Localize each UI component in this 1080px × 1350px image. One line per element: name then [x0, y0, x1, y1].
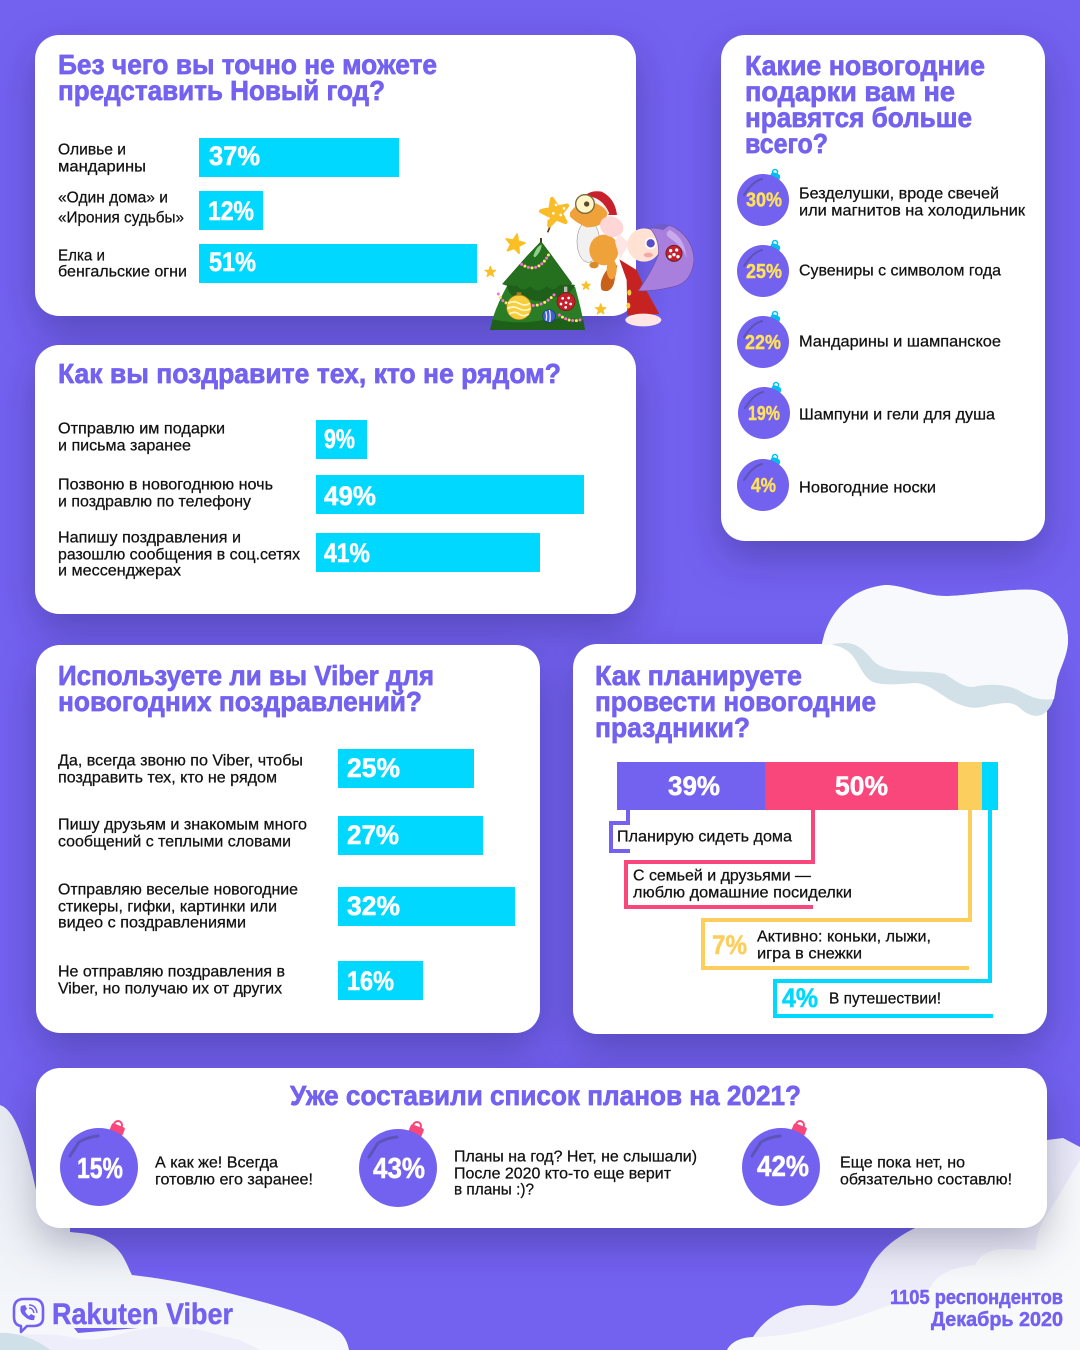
- row: olivier 37%: [58, 138, 399, 177]
- item: 43%: 43%: [373, 1153, 425, 1185]
- row: calls 25%: поздравить тех, кто не рядом: [58, 769, 277, 786]
- row: films 12%: «Один дома» и: [58, 189, 168, 206]
- callout: travel 4%: 4%: [782, 983, 818, 1013]
- heading: Как планируете: [595, 660, 802, 691]
- panel: using Viber for greetings: [36, 645, 540, 1033]
- row: tree 51%: Елка и: [58, 247, 105, 264]
- callout: family and friends: [626, 810, 852, 907]
- row: films 12%: «Ирония судьбы»: [58, 209, 184, 226]
- heading: новогодних поздравлений?: [58, 686, 422, 717]
- row: messages 41%: и мессенджерах: [58, 562, 181, 579]
- heading: Как вы поздравите тех, кто не рядом?: [58, 358, 561, 389]
- item: 15%: 15%: [77, 1153, 123, 1185]
- row: messages 41%: [58, 529, 540, 579]
- row: messages 41%: Напишу поздравления и: [58, 529, 241, 546]
- cloud: bottom right snow: [727, 1138, 1080, 1350]
- callout: family and friends: С семьей и друзьями —: [633, 867, 811, 884]
- item: 43%: [359, 1122, 697, 1207]
- respondents note: Декабрь 2020: [931, 1309, 1063, 1331]
- row: messages 41%: 41%: [324, 538, 370, 568]
- row: stickers 32%: [58, 881, 515, 931]
- heading: подарки вам не: [745, 76, 955, 107]
- heading: Без чего вы точно не можете: [58, 49, 437, 80]
- row: films 12%: 12%: [208, 196, 254, 226]
- item: trinkets 30%: Безделушки, вроде свечей: [799, 185, 999, 202]
- heading: Какие новогодние: [745, 50, 985, 81]
- callout: stay at home: Планирую сидеть дома: [617, 828, 792, 845]
- row: only receive 16%: Viber, но получаю их от других: [58, 980, 282, 997]
- row: gifts 9%: 9%: [324, 424, 355, 454]
- respondents note: [890, 1287, 1063, 1331]
- row: only receive 16%: 16%: [347, 966, 394, 996]
- heading: Уже составили список планов на 2021?: [290, 1080, 801, 1111]
- row: phone 49%: [58, 475, 584, 514]
- stacked bar: 50%: [835, 771, 888, 801]
- heading: [745, 50, 985, 159]
- row: messages 27%: [58, 816, 483, 855]
- row: olivier 37%: Оливье и: [58, 141, 126, 158]
- item: trinkets 30%: [737, 170, 1026, 226]
- logo: Rakuten Viber: Rakuten Viber: [52, 1298, 233, 1331]
- item: tangerines 22%: [737, 312, 1001, 368]
- row: calls 25%: [58, 749, 474, 788]
- row: gifts 9%: [58, 420, 367, 459]
- item: trinkets 30%: или магнитов на холодильник: [799, 202, 1026, 219]
- row: stickers 32%: Отправляю веселые новогодние: [58, 881, 298, 898]
- item: tangerines 22%: 22%: [745, 332, 781, 354]
- row: stickers 32%: стикеры, гифки, картинки или: [58, 898, 277, 915]
- row: tree 51%: 51%: [209, 247, 256, 277]
- row: calls 25%: Да, всегда звоню по Viber, чтобы: [58, 752, 303, 769]
- row: phone 49%: и поздравлю по телефону: [58, 493, 251, 510]
- row: gifts 9%: и письма заранее: [58, 437, 191, 454]
- cloud: bottom left snow: [0, 1105, 349, 1350]
- item: shampoo 19%: 19%: [748, 403, 780, 425]
- row: tree 51%: [58, 244, 477, 283]
- illustration: Christmas tree, cat and girl: [485, 191, 694, 330]
- item: 43%: в планы :)?: [454, 1181, 534, 1198]
- heading: [58, 49, 437, 106]
- panel: disliked gifts: [721, 35, 1045, 541]
- row: stickers 32%: 32%: [347, 891, 400, 921]
- row: only receive 16%: [58, 961, 423, 1000]
- row: films 12%: [58, 189, 263, 230]
- callout: stay at home: [611, 810, 792, 851]
- item: 42%: Еще пока нет, но: [840, 1154, 965, 1171]
- callout: active 7%: [703, 810, 970, 968]
- heading: провести новогодние: [595, 686, 876, 717]
- item: tangerines 22%: Мандарины и шампанское: [799, 333, 1001, 350]
- row: messages 27%: Пишу друзьям и знакомым много: [58, 816, 307, 833]
- girl: [597, 213, 694, 326]
- item: 42%: 42%: [757, 1151, 809, 1183]
- small stars: [485, 232, 606, 314]
- callout: travel 4%: В путешествии!: [829, 990, 941, 1007]
- heading: [58, 660, 434, 717]
- respondents note: 1105 респондентов: [890, 1287, 1063, 1309]
- heading: всего?: [745, 128, 828, 159]
- heading: праздники?: [595, 712, 750, 743]
- snow on plans panel: [822, 585, 1068, 716]
- item: souvenirs 25%: 25%: [746, 261, 782, 283]
- item: shampoo 19%: Шампуни и гели для душа: [799, 406, 995, 423]
- item: souvenirs 25%: Сувениры с символом года: [799, 262, 1001, 279]
- callout: active 7%: игра в снежки: [757, 945, 862, 962]
- row: calls 25%: 25%: [347, 753, 400, 783]
- row: gifts 9%: Отправлю им подарки: [58, 420, 225, 437]
- item: 15%: готовлю его заранее!: [155, 1171, 313, 1188]
- panel: plans list for 2021: [36, 1068, 1047, 1228]
- heading: представить Новый год?: [58, 75, 385, 106]
- stacked bar: [617, 762, 998, 810]
- row: messages 27%: сообщений с теплыми словами: [58, 833, 291, 850]
- item: 42%: обязательно составлю!: [840, 1171, 1012, 1188]
- heading: Используете ли вы Viber для: [58, 660, 434, 691]
- stacked bar: 39%: [668, 771, 720, 801]
- item: trinkets 30%: 30%: [746, 190, 782, 212]
- heading: нравятся больше: [745, 102, 972, 133]
- row: phone 49%: Позвоню в новогоднюю ночь: [58, 476, 273, 493]
- item: 15%: А как же! Всегда: [155, 1154, 278, 1171]
- item: socks 4%: 4%: [751, 475, 776, 497]
- row: olivier 37%: мандарины: [58, 158, 146, 175]
- item: shampoo 19%: [738, 382, 995, 439]
- panel: how you will greet those far away: [35, 345, 636, 614]
- row: messages 41%: разошлю сообщения в соц.сетях: [58, 546, 300, 563]
- callout: family and friends: люблю домашние посиделки: [633, 884, 852, 901]
- cat: [539, 191, 619, 291]
- item: socks 4%: Новогодние носки: [799, 479, 936, 496]
- callout: active 7%: Активно: коньки, лыжи,: [757, 928, 931, 945]
- row: olivier 37%: 37%: [209, 141, 260, 171]
- row: phone 49%: 49%: [324, 481, 376, 511]
- item: 43%: После 2020 кто-то еще верит: [454, 1165, 672, 1182]
- item: souvenirs 25%: [737, 240, 1001, 297]
- item: socks 4%: [737, 454, 936, 511]
- icon: viber bubble: [14, 1299, 43, 1332]
- panel: must-have for New Year: [35, 35, 636, 316]
- item: 42%: [742, 1121, 1012, 1206]
- callout: active 7%: 7%: [712, 930, 747, 960]
- row: messages 27%: 27%: [347, 820, 399, 850]
- row: only receive 16%: Не отправляю поздравления в: [58, 963, 285, 980]
- tree: [490, 238, 585, 330]
- heading: [595, 660, 876, 743]
- item: 15%: [60, 1121, 313, 1206]
- row: stickers 32%: видео с поздравлениями: [58, 914, 246, 931]
- item: 43%: Планы на год? Нет, не слышали): [454, 1148, 697, 1165]
- row: tree 51%: бенгальские огни: [58, 263, 187, 280]
- panel: holiday plans: [573, 644, 1047, 1034]
- callout: travel 4%: [775, 810, 993, 1016]
